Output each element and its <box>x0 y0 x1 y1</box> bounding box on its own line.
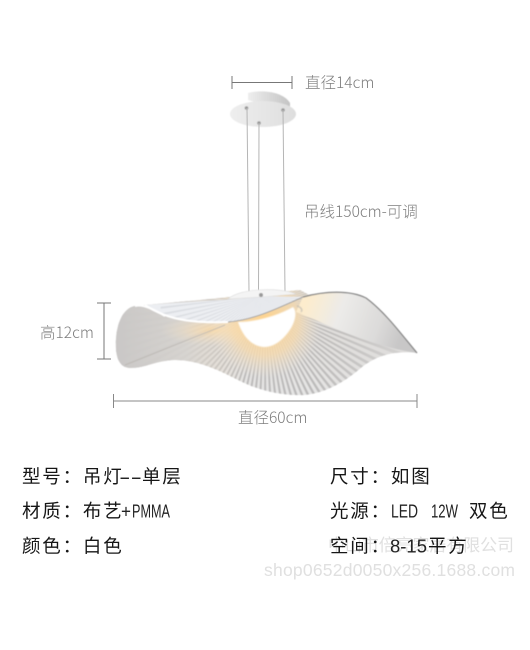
dimension: canopy diameter <box>232 71 374 93</box>
spec: right column: 平方 <box>428 532 469 558</box>
label: lamp diameter: 直径60cm <box>238 406 307 428</box>
spec: right column: 8-15 <box>390 536 427 556</box>
spec: left column: -- <box>119 467 142 487</box>
watermark: 中山市倍亮家居有限公司 <box>328 536 514 555</box>
product diagram: pendant lamp with dimensions <box>22 75 514 580</box>
watermark: shop0652d0050x256.1688.com <box>264 560 515 580</box>
spec: left column: PMMA <box>132 502 170 522</box>
spec: left column: 型号：吊灯 <box>22 463 124 489</box>
spec: left column <box>22 463 183 558</box>
watermark <box>264 536 515 580</box>
right inner panel <box>296 292 417 353</box>
spec: right column: 尺寸：如图 <box>330 463 432 489</box>
spec: left column: 单层 <box>142 463 183 489</box>
spec: right column: 光源： <box>330 498 391 524</box>
spec: right column <box>330 463 510 558</box>
spec: left column: 材质：布艺 <box>22 498 124 524</box>
suspension cables <box>247 108 285 292</box>
label: cable length: 吊线150cm-可调 <box>304 200 418 222</box>
dimension: lamp height <box>40 303 111 359</box>
ceiling canopy <box>230 91 296 127</box>
lamp shade <box>115 289 418 396</box>
label: canopy diameter: 直径14cm <box>305 71 374 93</box>
spec: left column: 颜色：白色 <box>22 532 124 558</box>
label: lamp height: 高12cm <box>40 321 94 343</box>
spec: right column: 12W <box>431 502 458 522</box>
spec: right column: 空间： <box>330 532 391 558</box>
spec: right column: LED <box>391 502 418 522</box>
mount cap <box>228 290 296 299</box>
light bulb <box>238 306 302 347</box>
dimension: lamp diameter <box>114 394 417 428</box>
top brim <box>145 296 303 322</box>
spec: left column: + <box>121 502 131 522</box>
shade underside with pleats <box>115 290 412 396</box>
shade edge <box>145 305 228 322</box>
spec: right column: 双色 <box>469 498 510 524</box>
